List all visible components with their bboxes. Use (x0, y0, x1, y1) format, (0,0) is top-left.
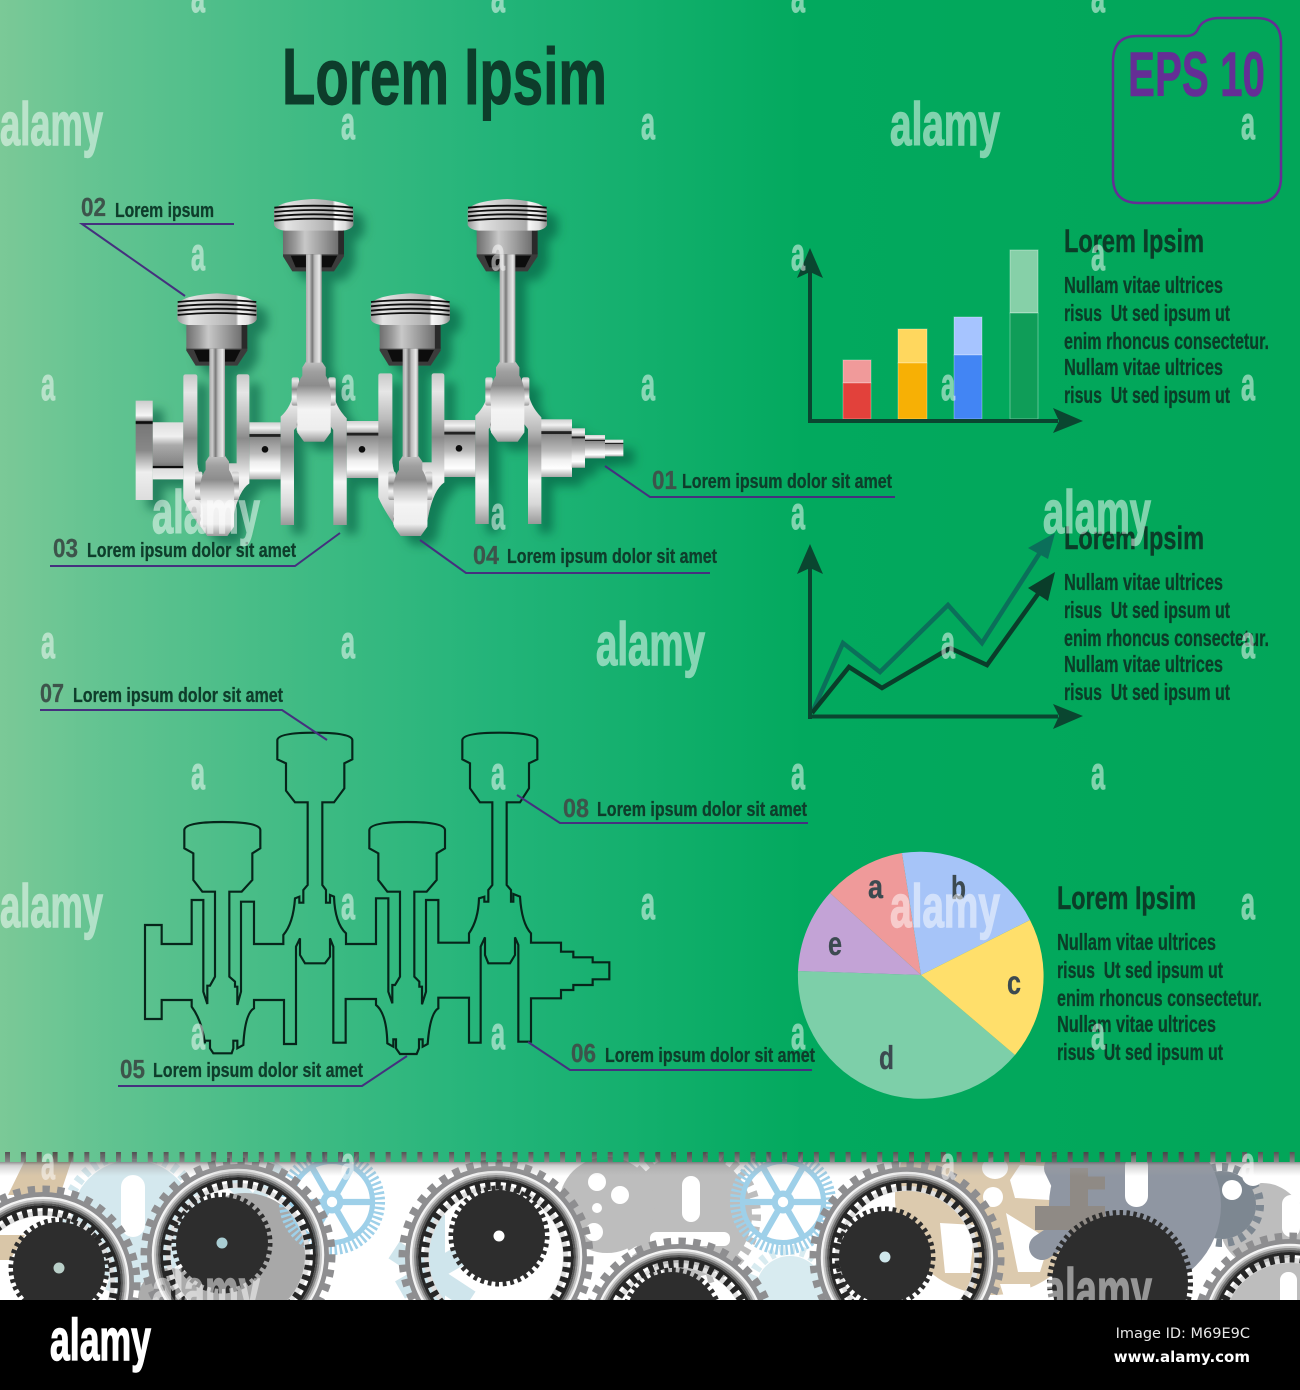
stock watermark: a (191, 747, 205, 799)
stock watermark: alamy (0, 91, 103, 158)
callout 01 (605, 465, 895, 497)
stock watermark: alamy (890, 873, 1000, 940)
grey gears with slots (138, 1149, 1300, 1390)
stock watermark: a (941, 358, 955, 410)
callout 06: Lorem ipsum dolor sit amet (605, 1045, 815, 1067)
pie labels: a (868, 868, 884, 905)
dark line (812, 572, 1055, 713)
stock watermark: alamy (152, 479, 260, 546)
stock watermark: a (1241, 1137, 1255, 1189)
EPS 10 badge (1113, 18, 1281, 203)
piston 4 (468, 199, 547, 442)
pale blue gears (65, 1154, 830, 1330)
stock watermark: a (341, 1137, 355, 1189)
piston 3 (371, 293, 450, 536)
ring gears (0, 1164, 1300, 1390)
line chart (797, 533, 1083, 729)
stock watermark: a (191, 1007, 205, 1059)
callout 02: 02 (81, 192, 106, 222)
callout 08: Lorem ipsum dolor sit amet (597, 799, 807, 821)
stock watermark: a (1091, 1007, 1105, 1059)
text block 3: risus Ut sed ipsum ut (1057, 957, 1223, 983)
callout 05 (118, 1054, 407, 1086)
stock watermark: a (791, 747, 805, 799)
slice a (830, 853, 921, 975)
title: Lorem Ipsim (282, 32, 607, 121)
slice c (921, 920, 1044, 1055)
text block 2 (1064, 520, 1269, 705)
text block 3: risus Ut sed ipsum ut (1057, 1039, 1223, 1065)
stock footer band (0, 1300, 1300, 1390)
text block 2: risus Ut sed ipsum ut (1064, 597, 1230, 623)
piston 2 (274, 199, 353, 442)
stock watermark: alamy (596, 611, 705, 678)
tan gears (0, 1099, 1091, 1300)
stock watermark: a (341, 616, 355, 668)
footer logo: alamy (50, 1308, 151, 1373)
text block 3: Nullam vitae ultrices (1057, 1011, 1216, 1037)
stock watermark: a (641, 358, 655, 410)
stock watermark: a (791, 487, 805, 539)
stock watermark: a (791, 1007, 805, 1059)
text block 2: Nullam vitae ultrices (1064, 651, 1223, 677)
bar 2 (898, 329, 927, 419)
stock watermark: alamy (0, 873, 103, 940)
callout 01: Lorem ipsum dolor sit amet (682, 471, 892, 493)
text block 2: Lorem Ipsim (1064, 520, 1204, 556)
stock watermark: a (1241, 616, 1255, 668)
callout 05: Lorem ipsum dolor sit amet (153, 1060, 363, 1082)
stock watermark: a (641, 97, 655, 149)
bar 4 (1010, 250, 1038, 419)
callout 06 (528, 1038, 815, 1070)
blue snowflake gears (284, 1154, 831, 1250)
stock watermark: a (1091, 228, 1105, 280)
stock watermark: alamy (152, 1257, 260, 1324)
callout 07 (40, 678, 327, 740)
callout 02: Lorem ipsum (115, 200, 214, 222)
stock watermark: alamy (1043, 479, 1151, 546)
stock watermark: a (491, 487, 505, 539)
oil holes (262, 445, 462, 453)
stock watermark: alamy (1044, 1257, 1152, 1324)
stock watermark: a (1241, 358, 1255, 410)
text block 3 (1057, 880, 1262, 1065)
stock watermark: a (41, 358, 55, 410)
stock watermark: a (491, 747, 505, 799)
black gears (12, 1188, 1190, 1366)
blue-grey gears (1035, 1119, 1264, 1291)
text block 1: risus Ut sed ipsum ut (1064, 382, 1230, 408)
text block 3: Nullam vitae ultrices (1057, 929, 1216, 955)
text block 2: Nullam vitae ultrices (1064, 569, 1223, 595)
text block 1 (1064, 223, 1269, 408)
crank journals (153, 419, 623, 479)
callout 07: 07 (40, 678, 64, 708)
callout 05: 05 (120, 1054, 145, 1084)
footer image id: Image ID: M69E9C (1116, 1326, 1250, 1342)
stock watermark: a (41, 1137, 55, 1189)
stock watermark: a (341, 358, 355, 410)
stock watermark: a (491, 228, 505, 280)
stock watermark: a (491, 1007, 505, 1059)
slice d (798, 971, 1015, 1099)
callout 03 (50, 533, 340, 566)
realistic crankshaft and pistons (136, 199, 623, 536)
bar 1 (843, 360, 871, 419)
stock watermark: a (41, 616, 55, 668)
crank webs (183, 373, 541, 527)
callout 08 (517, 793, 808, 823)
bar 3 (954, 317, 982, 419)
stock watermark: a (1091, 747, 1105, 799)
gear strip background (0, 1099, 1300, 1390)
stock watermark: a (341, 877, 355, 929)
outline crankshaft and pistons (145, 733, 609, 1054)
text block 1: risus Ut sed ipsum ut (1064, 300, 1230, 326)
callout 03: Lorem ipsum dolor sit amet (87, 540, 296, 562)
stock watermark: a (1241, 97, 1255, 149)
callout 06: 06 (571, 1038, 596, 1068)
text block 1: Nullam vitae ultrices (1064, 272, 1223, 298)
pie labels: e (828, 925, 842, 962)
callout 04 (420, 540, 717, 573)
pie chart (798, 852, 1044, 1099)
teal line (812, 533, 1055, 713)
line chart axes (797, 544, 1083, 729)
stock watermark: a (941, 1137, 955, 1189)
footer url: www.alamy.com (1114, 1348, 1250, 1366)
pie labels (828, 868, 1021, 1076)
text block 1: Lorem Ipsim (1064, 223, 1204, 259)
callout 04: Lorem ipsum dolor sit amet (507, 546, 717, 568)
stock watermark: a (941, 616, 955, 668)
stock watermark: a (341, 97, 355, 149)
text block 2: risus Ut sed ipsum ut (1064, 679, 1230, 705)
stock watermark: a (1241, 877, 1255, 929)
stock watermark: a (641, 877, 655, 929)
pie labels: d (879, 1039, 894, 1076)
text block 3: Lorem Ipsim (1057, 880, 1196, 916)
slice e (798, 893, 921, 975)
callout 01: 01 (652, 465, 677, 495)
pie labels: b (951, 869, 966, 906)
callout 08: 08 (563, 793, 589, 823)
callout 07: Lorem ipsum dolor sit amet (73, 685, 283, 707)
callout 04: 04 (473, 540, 499, 570)
bar chart (797, 248, 1083, 433)
crank flange (136, 401, 153, 500)
callout 02 (81, 192, 234, 296)
piston 1 (177, 293, 257, 536)
rack teeth (0, 1151, 1300, 1162)
stock watermark: a (191, 228, 205, 280)
stock watermark: a (791, 228, 805, 280)
text block 1: Nullam vitae ultrices (1064, 354, 1223, 380)
slice b (902, 852, 1030, 975)
callout 03: 03 (53, 533, 78, 563)
pie labels: c (1007, 964, 1021, 1001)
stock watermark: alamy (890, 91, 1000, 158)
chart axes (797, 248, 1083, 433)
